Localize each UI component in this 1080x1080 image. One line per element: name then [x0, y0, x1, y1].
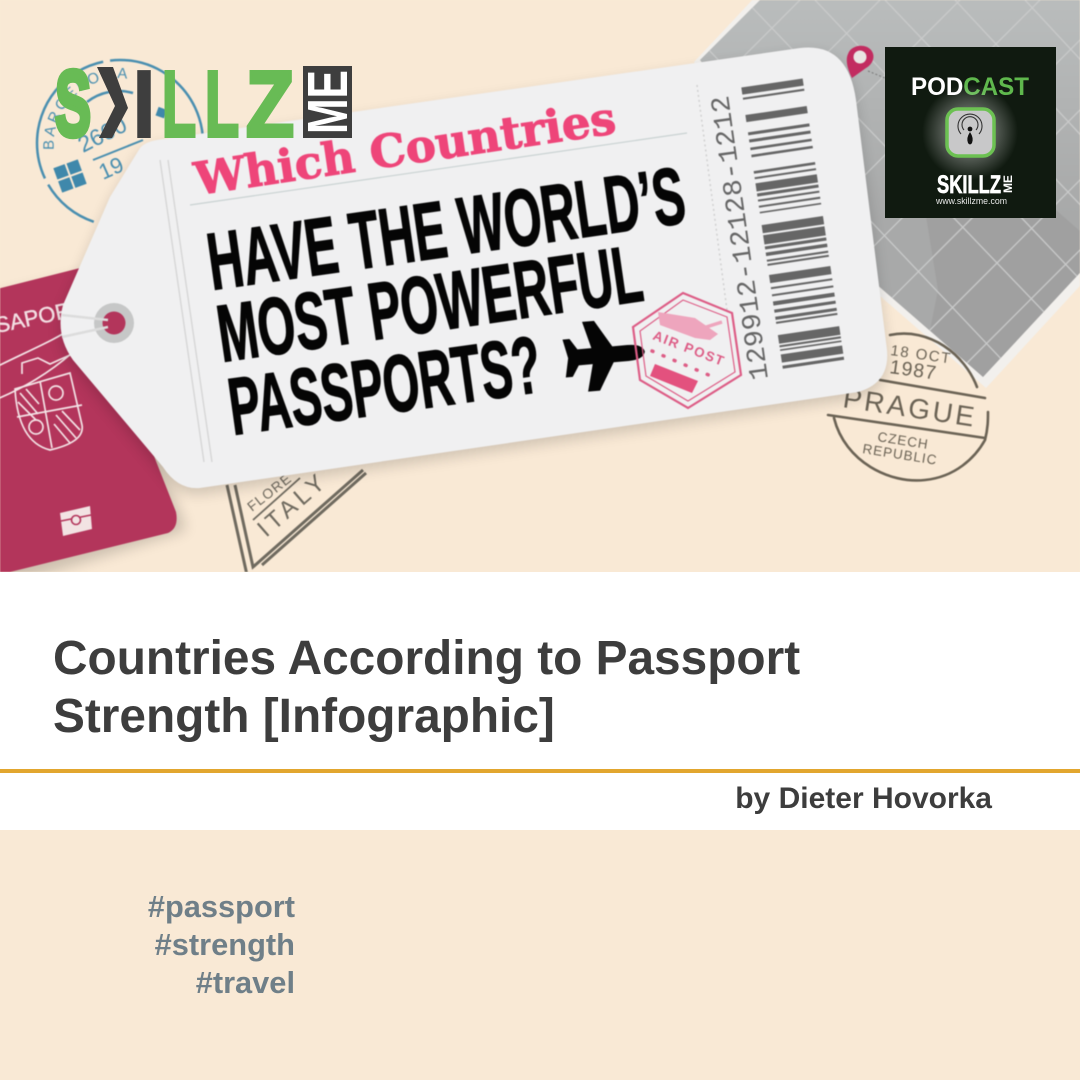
tag headline: HAVE THE WORLD’S [202, 151, 691, 308]
stamp: Prague: 1987 [888, 356, 938, 385]
badge heading: PODCAST [911, 73, 1029, 101]
map with grid [680, 0, 1080, 400]
icon: podcast [922, 84, 1018, 180]
logo: SKILLZ ME: Z [246, 52, 294, 156]
logo: SKILLZ ME: I [134, 52, 154, 156]
stamp: Italy: ITALY [252, 470, 330, 543]
stamp: Prague: PRAGUE [841, 382, 976, 432]
stamp: Barcelona: 2600 [73, 111, 131, 157]
hashtags: #travel [196, 965, 295, 1000]
tag headline: PASSPORTS? [223, 320, 546, 453]
badge url: www.skillzme.com [935, 196, 1007, 207]
logo: SKILLZ ME [55, 52, 360, 156]
stamp: Prague [828, 334, 988, 480]
gold divider rule [0, 769, 1080, 773]
main title: Countries According to Passport [53, 632, 800, 685]
hashtags [148, 889, 295, 1000]
logo: SKILLZ ME: L [162, 52, 196, 156]
badge logo: SKILLZ [937, 171, 1001, 199]
icon: airplane [561, 317, 648, 393]
barcode [741, 78, 844, 369]
stamp: Barcelona: 19 [95, 152, 127, 185]
serial number: 129912-12128-1212 [707, 94, 777, 382]
main title: Strength [Infographic] [53, 690, 555, 743]
tag headline [202, 151, 691, 453]
passport crest [0, 328, 82, 450]
tag hole [62, 303, 134, 343]
hashtags: #passport [148, 889, 295, 924]
podcast badge [885, 47, 1056, 218]
main title [53, 632, 800, 743]
logo: SKILLZ ME: S [55, 52, 91, 156]
hero illustration [0, 0, 1080, 572]
passport chip [60, 506, 92, 536]
stamp: Prague: REPUBLIC [862, 441, 938, 468]
passport [0, 268, 186, 585]
logos overlay [54, 47, 1056, 218]
stamp: air post: AIR POST [651, 328, 727, 369]
stamp: Barcelona [35, 58, 204, 224]
stamp: Barcelona: BARCELONA [42, 67, 128, 150]
badge logo: ME [1001, 175, 1015, 193]
stamp: Italy: FLORE [244, 470, 295, 514]
stamp: air post [633, 293, 741, 408]
tag headline: MOST POWERFUL [212, 229, 648, 380]
luggage tag [61, 47, 887, 494]
author byline: by Dieter Hovorka [735, 782, 992, 815]
logo: SKILLZ ME: ME [296, 70, 360, 134]
stamp: Prague: CZECH [877, 429, 930, 452]
tag subtitle: Which Countries [190, 91, 619, 206]
icon: map pin [847, 46, 885, 78]
stamp: Italy [227, 470, 366, 575]
hashtags: #strength [155, 927, 295, 962]
white title band [0, 572, 1080, 830]
stamp: Prague: 18 OCT [889, 342, 953, 368]
logo: SKILLZ ME: L [205, 52, 239, 156]
